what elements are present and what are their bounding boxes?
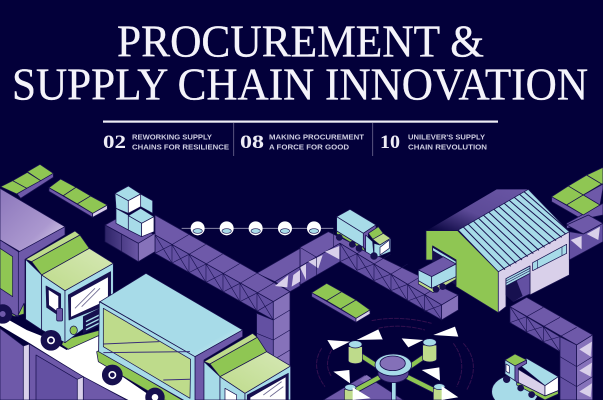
conveyor node chain <box>182 221 300 235</box>
conveyor to warehouse <box>300 232 458 320</box>
contents strip: 02 <box>103 132 126 153</box>
conveyor: main diagonal <box>155 215 300 320</box>
green tiles: top right <box>552 167 603 228</box>
cab one <box>26 231 113 350</box>
contents strip: MAKING PROCUREMENT <box>269 132 365 142</box>
warehouse <box>426 189 569 313</box>
contents strip: CHAINS FOR RESILIENCE <box>132 142 229 152</box>
illustration: left half <box>0 164 300 400</box>
drone signal arcs <box>317 318 473 390</box>
conveyor: lower right <box>510 297 593 400</box>
truck one <box>0 188 113 350</box>
road barriers <box>0 328 127 400</box>
drone <box>317 318 473 400</box>
contents strip: REWORKING SUPPLY <box>132 132 212 142</box>
stacked cartons <box>115 186 154 237</box>
truck two <box>97 273 291 400</box>
contents strip <box>103 120 498 156</box>
cab two <box>204 333 291 400</box>
contents strip: 10 <box>380 132 400 153</box>
contents strip: CHAIN REVOLUTION <box>408 142 487 152</box>
green tiles: lower <box>312 283 370 322</box>
contents strip: 08 <box>240 132 264 153</box>
transport node <box>300 221 333 235</box>
road <box>0 315 153 400</box>
conveyor: far right <box>567 215 603 260</box>
trailer at warehouse door <box>418 257 456 293</box>
illustration: right half <box>300 167 603 400</box>
small truck on conveyor <box>336 209 391 259</box>
title <box>12 16 588 110</box>
green tiles: top left <box>1 164 107 217</box>
contents strip: A FORCE FOR GOOD <box>269 142 350 152</box>
title: PROCUREMENT & <box>117 16 484 66</box>
conveyor: vertical leg <box>257 292 290 380</box>
contents strip: UNILEVER'S SUPPLY <box>408 132 485 142</box>
base under boxes <box>105 217 155 262</box>
forklift truck on platform <box>492 354 558 400</box>
